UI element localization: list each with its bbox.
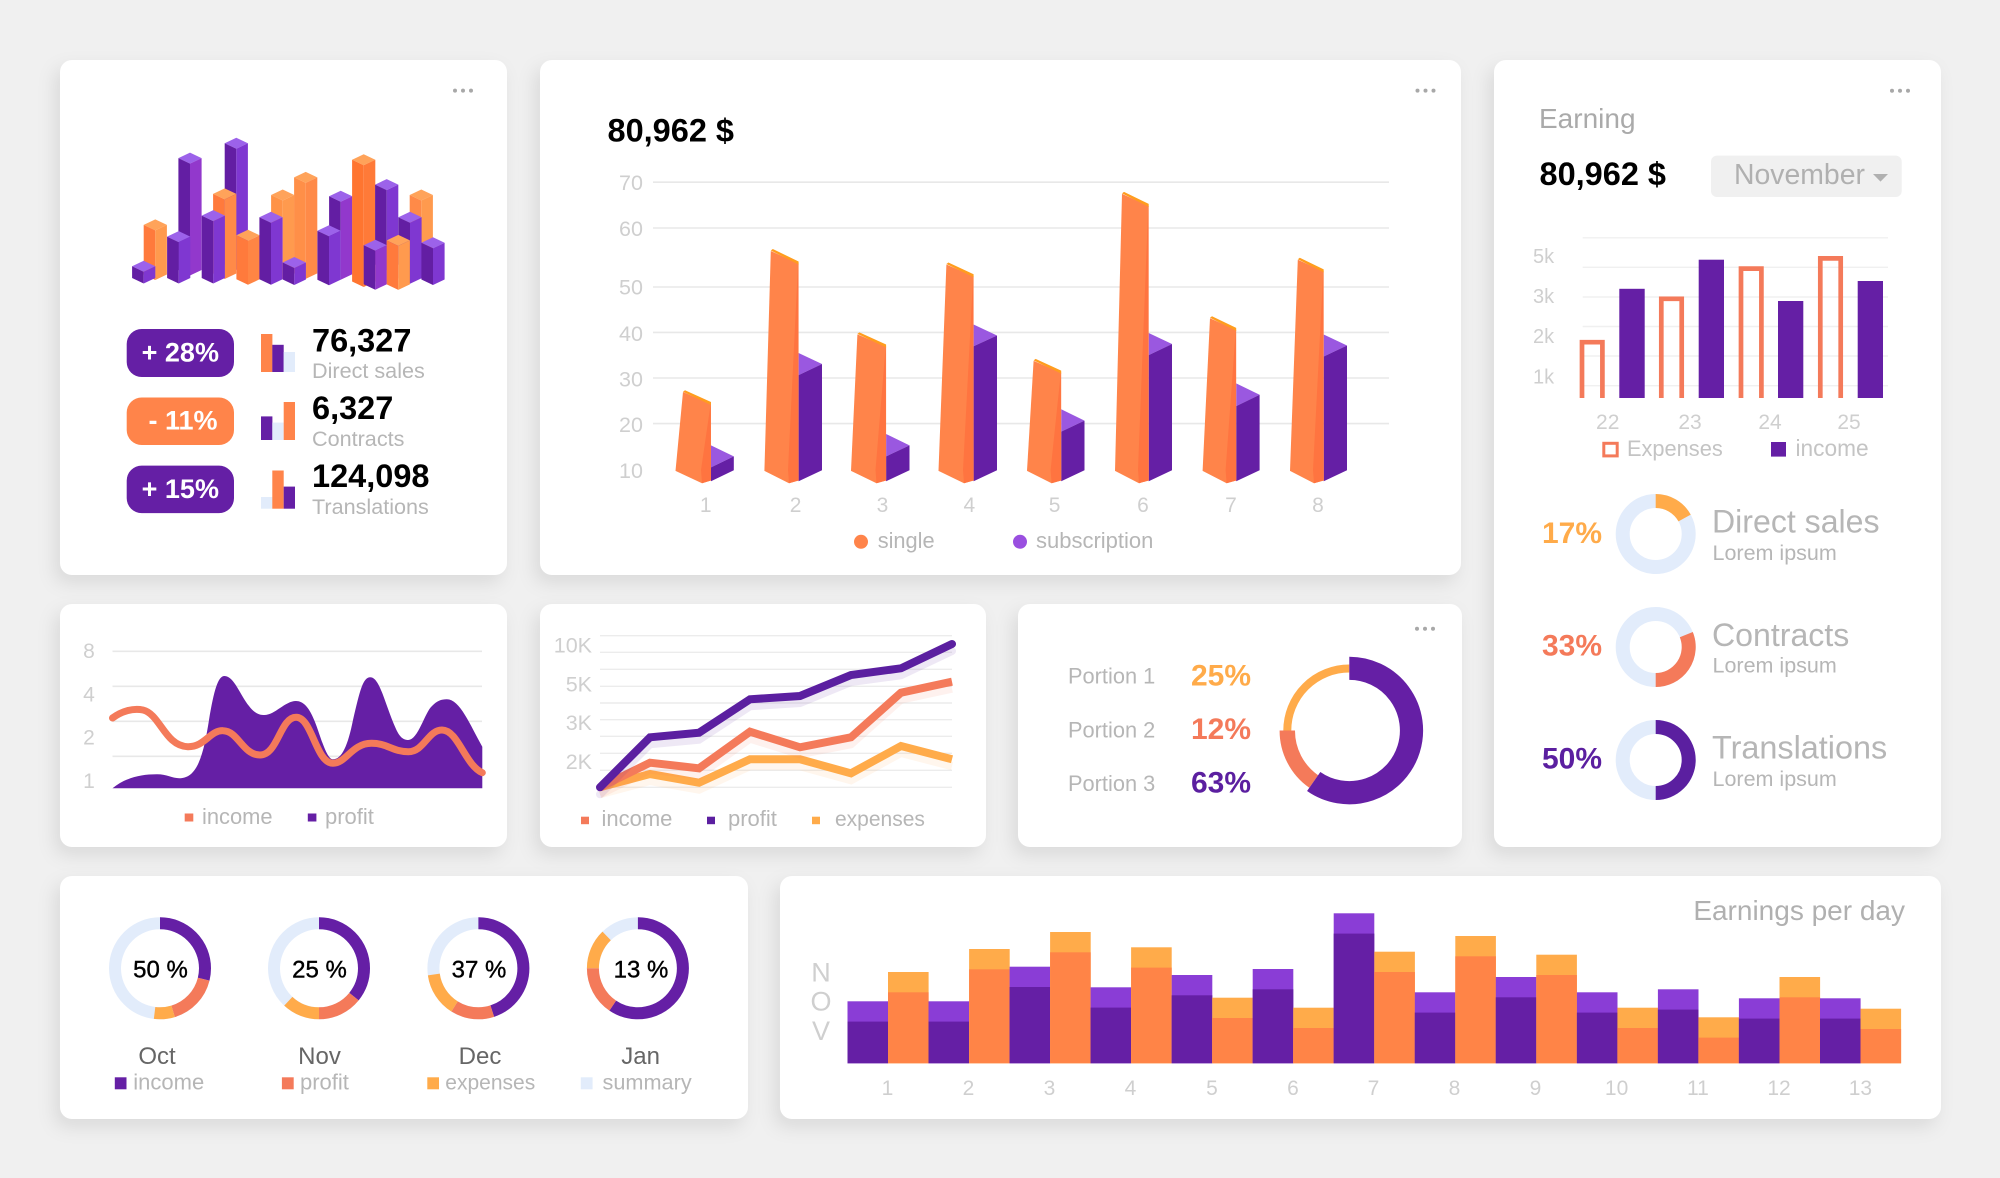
x axis labels: 5 [1049, 494, 1060, 517]
stat row: contracts: Contracts [312, 426, 405, 451]
x axis labels [700, 494, 1324, 517]
legend: subscription [1036, 528, 1153, 553]
heading: earning: Earning [1539, 103, 1636, 134]
donut chart [1287, 668, 1412, 793]
stat row: contracts: - 11% [148, 406, 218, 436]
portion list: Portion 3 [1068, 771, 1155, 796]
y axis labels: 3k [1533, 286, 1555, 308]
y axis labels: 50 [619, 276, 643, 300]
metric: translations: Translations [1712, 730, 1887, 766]
dropdown: month: November [1734, 159, 1865, 191]
stacked bar chart [848, 913, 1901, 1063]
x axis labels: 11 [1687, 1077, 1709, 1100]
x axis labels: 10 [1605, 1077, 1628, 1100]
y axis labels: 4 [83, 684, 95, 706]
donut: december: 37 % [452, 956, 506, 984]
metric: contracts: 33% [1542, 630, 1602, 663]
y axis labels: 8 [83, 640, 95, 663]
x axis labels: 23 [1678, 411, 1702, 434]
x axis labels: 2 [790, 494, 801, 517]
stat row: contracts [127, 390, 405, 451]
y axis labels: 1k [1533, 366, 1555, 388]
legend: profit [300, 1069, 349, 1094]
legend: income [133, 1069, 204, 1094]
legend: summary [602, 1069, 692, 1094]
y axis labels [554, 634, 593, 774]
x axis labels: 2 [963, 1077, 974, 1100]
dropdown: month [1711, 156, 1902, 197]
month label: NOV: O [810, 987, 832, 1017]
donut: december [433, 923, 523, 1013]
legend: income [1796, 435, 1869, 461]
x axis labels [882, 1077, 1872, 1100]
stat row: contracts: 6,327 [312, 390, 393, 426]
portion list [1068, 660, 1251, 799]
line: income [112, 709, 482, 773]
area: profit [112, 676, 482, 788]
stat row: direct sales: 76,327 [312, 323, 411, 359]
x axis labels: 4 [1125, 1077, 1137, 1100]
x axis labels: 25 [1837, 411, 1861, 434]
month labels [138, 1043, 660, 1070]
3D bars [676, 192, 1347, 483]
metric: direct sales: Lorem ipsum [1712, 541, 1837, 565]
legend: income [202, 804, 273, 829]
month labels: Oct [138, 1043, 176, 1070]
heading: earnings per day: Earnings per day [1693, 895, 1905, 926]
y axis labels: 20 [619, 413, 643, 437]
portion list: 12% [1191, 713, 1251, 746]
stat row: translations: Translations [312, 494, 429, 519]
metric: translations: Lorem ipsum [1712, 767, 1837, 791]
legend: expenses [835, 808, 925, 831]
legend: profit [325, 804, 374, 829]
x axis labels: 22 [1596, 411, 1619, 434]
legend: profit [728, 806, 777, 831]
x axis labels: 7 [1225, 494, 1237, 517]
y axis labels: 5K [566, 672, 593, 696]
donut: november [274, 923, 364, 1013]
stat row: direct sales: Direct sales [312, 358, 425, 383]
y axis labels: 2k [1533, 326, 1555, 348]
metric: contracts [1542, 614, 1849, 680]
y axis labels: 2K [566, 750, 593, 774]
x axis labels [1596, 411, 1861, 434]
metric: contracts: Lorem ipsum [1712, 654, 1837, 678]
legend: income [602, 806, 672, 831]
menu dots [1416, 89, 1436, 93]
y axis labels: 5k [1533, 246, 1555, 268]
menu dots [453, 89, 473, 93]
y axis labels: 60 [619, 217, 643, 241]
y axis labels [83, 640, 95, 793]
y axis labels: 2 [83, 726, 95, 750]
legend [185, 804, 374, 829]
heading: total: 80,962 $ [608, 113, 734, 149]
legend [1604, 435, 1869, 461]
x axis labels: 13 [1849, 1077, 1872, 1100]
y axis labels: 3K [566, 711, 593, 735]
month labels: Nov [298, 1043, 341, 1070]
panel: area chart [60, 604, 507, 847]
stat row: direct sales: + 28% [142, 338, 219, 368]
month label: NOV: N [811, 958, 831, 988]
x axis labels: 4 [964, 494, 976, 517]
line: profit [600, 644, 952, 794]
portion list: 25% [1191, 660, 1251, 693]
bar chart: expenses and income [1582, 258, 1883, 398]
legend [854, 528, 1153, 553]
panel: earnings per day [780, 876, 1941, 1119]
x axis labels: 1 [882, 1077, 893, 1100]
portion list: Portion 2 [1068, 717, 1155, 742]
legend: expenses [445, 1071, 535, 1094]
donut: january [593, 923, 683, 1013]
panel: portions donut [1018, 604, 1462, 847]
y axis labels: 40 [619, 322, 643, 346]
menu dots [1415, 627, 1435, 631]
legend: single [878, 528, 935, 553]
x axis labels: 6 [1137, 494, 1149, 517]
panel: isometric summary [60, 60, 507, 575]
y axis labels: 10K [554, 634, 593, 658]
legend: Expenses [1627, 436, 1723, 461]
line: income [600, 682, 952, 794]
menu dots [1890, 89, 1910, 93]
metric: direct sales: 17% [1542, 517, 1602, 550]
x axis labels: 8 [1312, 494, 1324, 517]
stat row: translations: 124,098 [312, 458, 429, 494]
portion list: 63% [1191, 766, 1251, 799]
x axis labels: 1 [700, 494, 712, 517]
legend [115, 1069, 692, 1094]
month labels: Dec [459, 1043, 501, 1070]
donut: october [115, 923, 205, 1013]
donut: october: 50 % [133, 956, 188, 984]
metric: translations [1542, 727, 1887, 793]
y axis labels: 70 [619, 171, 643, 195]
x axis labels: 12 [1767, 1077, 1791, 1100]
x axis labels: 5 [1206, 1077, 1218, 1100]
metric: direct sales [1542, 501, 1880, 567]
x axis labels: 3 [877, 494, 888, 517]
panel: line chart [540, 604, 986, 847]
x axis labels: 9 [1530, 1077, 1541, 1100]
month label: NOV [810, 958, 832, 1046]
total amount: 80,962 $ [1540, 156, 1666, 192]
donut: january: 13 % [614, 956, 668, 984]
line: expenses [600, 746, 952, 794]
panel: main 3D bar chart [540, 60, 1461, 575]
stat row: translations: + 15% [142, 474, 219, 504]
y axis labels: 1 [83, 770, 95, 793]
metric: translations: 50% [1542, 742, 1602, 775]
metric: direct sales: Direct sales [1712, 504, 1880, 540]
x axis labels: 24 [1758, 411, 1782, 434]
stat row: direct sales [127, 323, 425, 383]
x axis labels: 7 [1368, 1077, 1379, 1100]
month labels: Jan [621, 1043, 660, 1070]
month label: NOV: V [812, 1016, 830, 1046]
isometric bar chart [132, 138, 445, 290]
x axis labels: 6 [1287, 1077, 1299, 1100]
panel: monthly donuts [60, 876, 748, 1119]
donut: november: 25 % [292, 956, 347, 984]
y axis labels [1533, 246, 1555, 388]
legend [581, 806, 925, 831]
y axis labels [619, 171, 643, 483]
y axis labels: 30 [619, 368, 643, 392]
y axis labels: 10 [619, 459, 643, 483]
stat row: translations [127, 458, 429, 519]
x axis labels: 8 [1449, 1077, 1460, 1100]
x axis labels: 3 [1044, 1077, 1055, 1100]
metric: contracts: Contracts [1712, 617, 1849, 653]
panel: earning [1494, 60, 1941, 847]
portion list: Portion 1 [1068, 663, 1155, 688]
